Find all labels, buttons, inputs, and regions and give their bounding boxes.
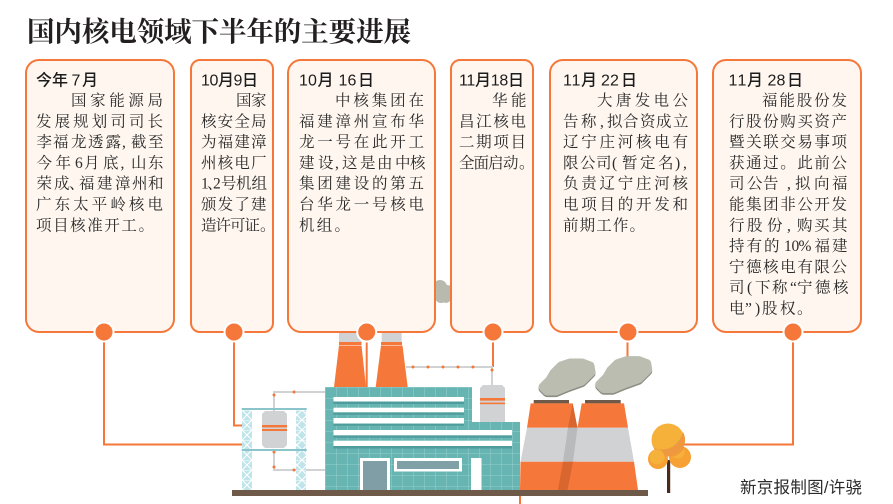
body text: 广东太平岭核电 [36, 196, 163, 214]
body text: 李福龙透露,截至 [36, 133, 164, 151]
body text: 辽宁庄河核电有 [563, 133, 688, 151]
timeline dot [784, 322, 802, 342]
cooling tower right [560, 400, 638, 490]
smoke plume right [600, 361, 648, 390]
illustration: nuclear plant [232, 333, 691, 496]
date: 今年7月 [36, 70, 98, 90]
body text [36, 92, 164, 234]
body text: 负责辽宁庄河核 [563, 175, 688, 193]
date: 10月9日 [201, 72, 258, 90]
credit: 新京报制图/许骁 [740, 478, 862, 497]
right storage tank [480, 385, 505, 422]
body text: 1、2号机组 [201, 175, 268, 193]
body text: 中核集团在 [335, 92, 424, 110]
body text: 司公告,拟向福 [729, 175, 848, 193]
body text: 全面启动。 [459, 154, 535, 172]
ground [232, 490, 648, 496]
body text: 荣成、福建漳州和 [36, 174, 164, 193]
body text: 电”)股权。 [729, 300, 813, 318]
title: 国内核电领域下半年的主要进展 [27, 16, 411, 47]
body text: 福能股份发 [762, 92, 847, 110]
timeline dot [94, 322, 114, 342]
body text: 限公司(暂定名), [563, 154, 687, 172]
cooling tower left [520, 400, 577, 490]
body text [729, 92, 849, 318]
body text: 国家 [236, 92, 266, 110]
panel: July [26, 60, 174, 342]
body text: 为福建漳 [201, 133, 266, 151]
body text [459, 92, 535, 172]
body text [299, 92, 426, 234]
body text: 持有的10%福建 [729, 237, 848, 255]
date: 10月16日 [299, 72, 374, 90]
tree [648, 424, 691, 493]
right cooling stack [376, 333, 408, 387]
body text: 行股份购买资产 [729, 112, 847, 130]
side door [471, 458, 482, 490]
body text: 台华龙一号核电 [299, 196, 424, 214]
body text: 今年6月底,山东 [36, 153, 164, 172]
timeline dot [224, 322, 244, 342]
date: 11月18日 [459, 72, 524, 90]
body text: 核安全局 [201, 112, 266, 130]
body text: 州核电厂 [201, 154, 266, 172]
timeline dot [484, 322, 502, 342]
left cooling stack [334, 333, 366, 387]
body text: 龙一号在此开工 [299, 133, 424, 151]
body text: 发展规划司司长 [36, 112, 163, 130]
timeline dot [618, 322, 638, 342]
connector lines from the timeline to the plant [104, 332, 793, 504]
body text: 造许可证。 [201, 216, 276, 234]
door [360, 458, 390, 490]
window [394, 458, 462, 472]
panel: November 28 [713, 60, 861, 342]
body text: 告称,拟合资成立 [563, 112, 689, 130]
body text: 福建漳州宣布华 [299, 112, 424, 130]
left storage tank [262, 411, 287, 448]
body text: 能集团非公开发 [729, 196, 847, 214]
tower shadow [558, 403, 578, 490]
body text: 集团建设的第五 [299, 175, 424, 193]
body text: 二期项目 [459, 133, 526, 151]
body text: 司(下称“宁德核 [729, 279, 849, 297]
body text: 电项目的开发和 [563, 196, 688, 214]
smoke plume left [543, 363, 591, 393]
timeline dot [357, 322, 376, 342]
body text: 暨关联交易事项 [729, 133, 847, 151]
body text: 获通过。此前公 [729, 153, 847, 172]
body text: 大唐发电公 [597, 92, 688, 110]
body text: 华能 [492, 92, 526, 110]
body text: 行股份,购买其 [729, 216, 849, 234]
date: 11月28日 [728, 72, 803, 90]
body text: 项目核准开工。 [36, 216, 154, 234]
small smoke behind cards [433, 280, 454, 303]
pipes between the stacks and the right tank [406, 366, 494, 385]
body text: 昌江核电 [459, 112, 526, 130]
body text: 建设,这是由中核 [299, 154, 426, 172]
left pipes [272, 390, 325, 472]
body text: 国家能源局 [71, 92, 163, 110]
body text: 前期工作。 [563, 216, 645, 234]
panel: October 9 [191, 60, 276, 342]
body text [201, 92, 276, 234]
body text [563, 92, 689, 234]
main building [325, 387, 520, 490]
panel: October 16 [288, 60, 435, 342]
scaffold [242, 408, 307, 490]
panel: November 18 [451, 60, 535, 342]
body text: 宁德核电有限公 [729, 258, 847, 276]
panel: November 22 [550, 60, 697, 342]
body text: 机组。 [299, 216, 350, 234]
date: 11月22日 [563, 72, 637, 90]
body text: 颁发了建 [201, 196, 267, 214]
